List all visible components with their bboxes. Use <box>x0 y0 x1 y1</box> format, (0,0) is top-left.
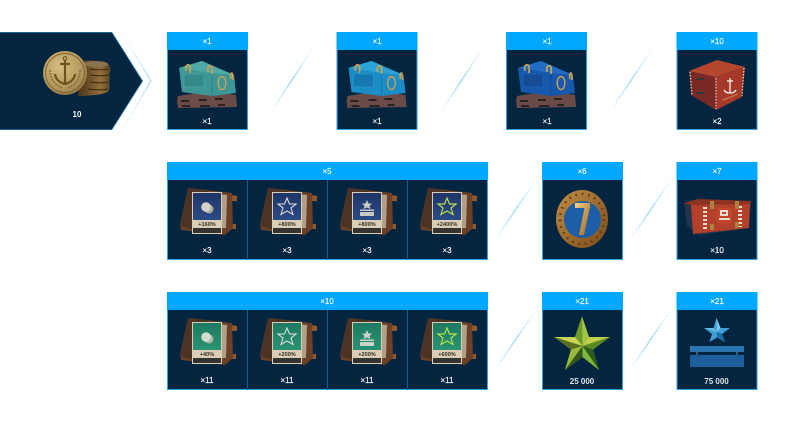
card: rank seven emblem <box>542 162 623 260</box>
card: dark blue container: ×1 <box>542 37 552 46</box>
card: green star 25 000: ×21 <box>575 297 589 306</box>
booster: green star +2400%: +2400% <box>437 222 457 228</box>
divider line <box>270 48 313 113</box>
booster: credits +40% <box>180 318 237 385</box>
banner: coins reward <box>0 32 143 130</box>
card: light blue container: ×1 <box>372 117 382 126</box>
card: red supply box: ×10 <box>710 246 724 255</box>
icon: light blue crate <box>346 61 406 108</box>
card: blue rank 75 000 <box>676 292 758 390</box>
card: dark blue container: ×1 <box>542 117 552 126</box>
icon: blue star and bars <box>690 318 744 367</box>
icon: red supply box <box>684 199 751 235</box>
booster: rank +800%: +800% <box>358 222 376 228</box>
panel: row three boosters: ×10 <box>320 297 334 306</box>
booster: star +200%: +200% <box>278 352 296 358</box>
card: dark blue container <box>506 32 587 130</box>
booster: star +800%: +800% <box>278 222 296 228</box>
booster: rank +800%: ×3 <box>362 246 372 255</box>
booster: green star +600%: +600% <box>438 352 456 358</box>
divider line <box>628 178 672 243</box>
divider line <box>493 178 537 243</box>
card: red anchor container: ×10 <box>710 37 724 46</box>
panel: row two boosters <box>167 162 488 260</box>
card: teal container <box>167 32 248 130</box>
booster: rank +200%: +200% <box>358 352 376 358</box>
panel: row two boosters: ×5 <box>322 167 332 176</box>
amount: 10: 10 <box>73 110 82 119</box>
card: light blue container: ×1 <box>372 37 382 46</box>
booster: credits +160%: ×3 <box>202 246 212 255</box>
divider line <box>628 308 672 373</box>
card: light blue container <box>336 32 418 130</box>
booster: credits +160%: +160% <box>198 222 216 228</box>
booster: green star +2400%: ×3 <box>442 246 452 255</box>
booster: credits +40%: ×11 <box>201 376 214 385</box>
booster: star +200% <box>260 318 317 385</box>
booster: rank +200%: ×11 <box>361 376 374 385</box>
icon: emblem 7 <box>556 190 608 248</box>
booster: star +800%: ×3 <box>282 246 292 255</box>
booster: green star +600%: ×11 <box>441 376 454 385</box>
booster: star +200%: ×11 <box>281 376 294 385</box>
booster: rank +800% <box>340 188 397 255</box>
divider line <box>493 308 537 373</box>
booster: rank +200% <box>340 318 397 385</box>
card: green star 25 000: 25 000 <box>570 377 595 386</box>
icon: teal crate <box>177 61 237 108</box>
card: teal container: ×1 <box>202 117 212 126</box>
card: red anchor container: ×2 <box>712 117 722 126</box>
card: green star 25 000 <box>542 292 623 390</box>
icon: dark blue crate <box>516 61 576 108</box>
icon: anchor coins <box>43 51 110 96</box>
panel: row three boosters <box>167 292 488 390</box>
booster: credits +40%: +40% <box>200 352 214 358</box>
booster: green star +600% <box>420 318 477 385</box>
card: blue rank 75 000: 75 000 <box>704 377 729 386</box>
card: red supply box <box>676 162 758 260</box>
booster: green star +2400% <box>420 188 477 255</box>
card: red supply box: ×7 <box>712 167 722 176</box>
card: red anchor container <box>676 32 758 130</box>
booster: credits +160% <box>180 188 237 255</box>
divider line <box>609 48 653 113</box>
card: teal container: ×1 <box>202 37 212 46</box>
card: rank seven emblem: ×6 <box>577 167 587 176</box>
booster: star +800% <box>260 188 317 255</box>
card: blue rank 75 000: ×21 <box>710 297 724 306</box>
icon: green star <box>554 316 610 370</box>
icon: red anchor crate <box>689 60 745 110</box>
divider line <box>440 48 483 113</box>
chevron divider <box>122 32 151 130</box>
